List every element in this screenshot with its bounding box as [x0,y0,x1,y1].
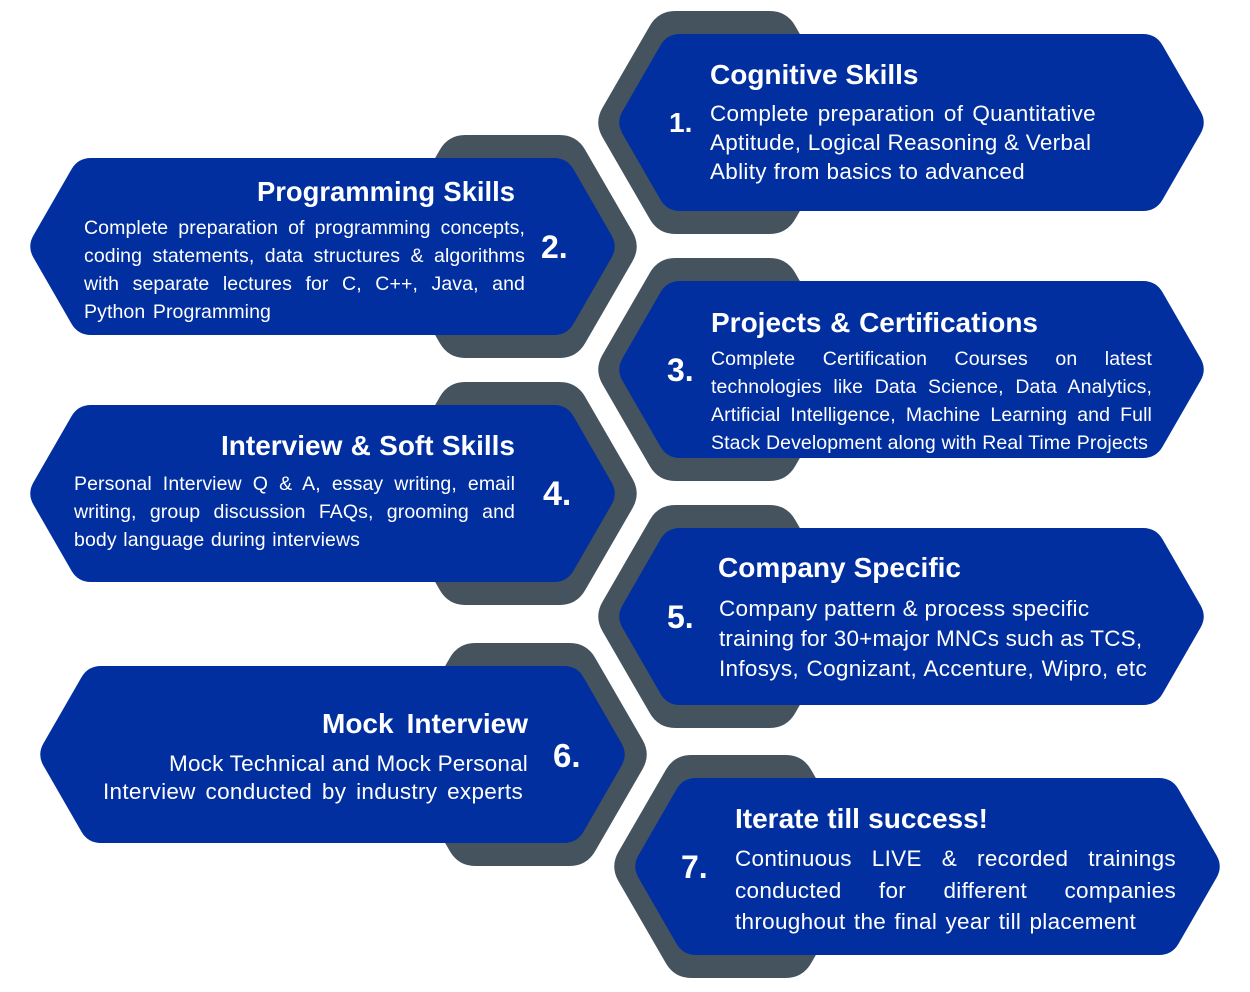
number 7: 7. [681,849,708,885]
heading: Iterate till success! [735,803,988,834]
panel: 1 Cognitive Skills [598,11,1204,234]
panel: 5 Company Specific [598,505,1204,728]
hexagon shapes [598,258,1204,481]
description: Interview conducted by industry experts [103,778,523,804]
hexagon shapes [40,643,647,866]
description: training for 30+major MNCs such as TCS, [719,626,1142,651]
description [711,348,1152,454]
panel: 7 Iterate till success [614,755,1220,978]
heading: Company Specific [718,552,961,583]
description: Continuous LIVE & recorded trainings [735,846,1176,871]
description: coding statements, data structures & algorithms [84,245,525,267]
description: throughout the final year till placement [735,909,1136,934]
heading: Interview & Soft Skills [221,430,515,461]
description: Aptitude, Logical Reasoning & Verbal [710,130,1091,154]
description: Infosys, Cognizant, Accenture, Wipro, etc [719,656,1147,681]
hexagon shapes [614,755,1220,978]
heading: Projects & Certifications [711,307,1038,338]
description [103,750,528,804]
hexagon shapes [30,382,637,605]
description [719,596,1147,681]
description: Complete preparation of Quantitative [710,100,1096,126]
heading: Programming Skills [257,176,515,207]
hexagon shapes [598,505,1204,728]
description: Company pattern & process specific [719,596,1089,621]
panel: 4 Interview & Soft Skills [30,382,637,605]
description: Complete Certification Courses on latest [711,348,1152,370]
number 3: 3. [667,352,694,388]
description: conducted for different companies [735,878,1176,902]
number 6: 6. [553,737,581,774]
heading: Cognitive Skills [710,59,918,90]
panel: 3 Projects & Certifications [598,258,1204,481]
description: with separate lectures for C, C++, Java, and [84,273,525,295]
number 2: 2. [541,229,568,265]
description: Stack Development along with Real Time Projects [711,432,1148,454]
description: body language during interviews [74,529,360,551]
description: Artificial Intelligence, Machine Learning and Full [711,404,1152,426]
description: writing, group discussion FAQs, grooming and [74,501,515,523]
heading: Mock Interview [322,708,528,739]
number 5: 5. [667,599,694,635]
description [74,473,515,551]
panel: 6 Mock Interview [40,643,647,866]
description [710,100,1096,184]
number 4: 4. [543,475,571,513]
panel: 2 Programming Skills [30,135,637,358]
description: Mock Technical and Mock Personal [169,750,528,776]
description: technologies like Data Science, Data Analytics, [711,376,1152,398]
hexagon shapes [30,135,637,358]
description [84,217,525,323]
description: Ablity from basics to advanced [710,158,1025,184]
number 1: 1. [669,107,692,138]
description [735,846,1176,934]
description: Python Programming [84,301,271,323]
hexagon shapes [598,11,1204,234]
description: Complete preparation of programming concepts, [84,217,525,239]
description: Personal Interview Q & A, essay writing, email [74,473,515,495]
